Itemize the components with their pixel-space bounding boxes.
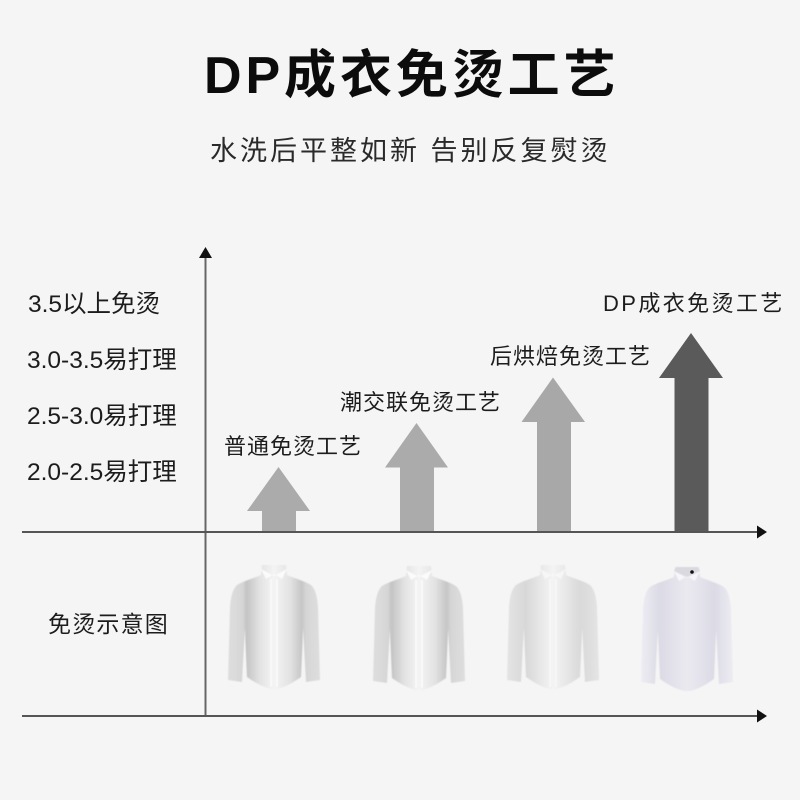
shirt 1 bbox=[228, 565, 320, 689]
arrow label: 后烘焙免烫工艺: 后烘焙免烫工艺 bbox=[490, 344, 651, 369]
arrow: 普通免烫工艺 bbox=[247, 467, 310, 531]
y-axis label: 2.5-3.0易打理: 2.5-3.0易打理 bbox=[27, 403, 177, 430]
arrow: 潮交联免烫工艺 bbox=[385, 423, 448, 531]
arrow label: 普通免烫工艺: 普通免烫工艺 bbox=[224, 434, 362, 459]
vertical axis bbox=[199, 247, 212, 717]
icon: shirt 4 collar button bbox=[690, 570, 694, 574]
shirt 3 bbox=[507, 565, 599, 689]
y-axis label: 3.5以上免烫: 3.5以上免烫 bbox=[28, 291, 160, 318]
y-axis label: 3.0-3.5易打理: 3.0-3.5易打理 bbox=[27, 347, 177, 374]
shirt 4 bbox=[641, 567, 733, 691]
arrow: DP成衣免烫工艺 bbox=[659, 333, 723, 531]
arrow: 后烘焙免烫工艺 bbox=[522, 378, 585, 531]
title: DP成衣免烫工艺 bbox=[204, 47, 619, 105]
horizontal axis: bottom bbox=[22, 710, 767, 722]
arrow label: DP成衣免烫工艺: DP成衣免烫工艺 bbox=[603, 291, 785, 316]
shirt 2 bbox=[373, 566, 465, 690]
y-axis label: 2.0-2.5易打理: 2.0-2.5易打理 bbox=[27, 459, 177, 486]
horizontal axis: top bbox=[22, 526, 767, 538]
arrow label: 潮交联免烫工艺: 潮交联免烫工艺 bbox=[340, 390, 501, 415]
subtitle: 水洗后平整如新 告别反复熨烫 bbox=[210, 136, 611, 166]
row label: 免烫示意图: 免烫示意图 bbox=[48, 611, 169, 637]
